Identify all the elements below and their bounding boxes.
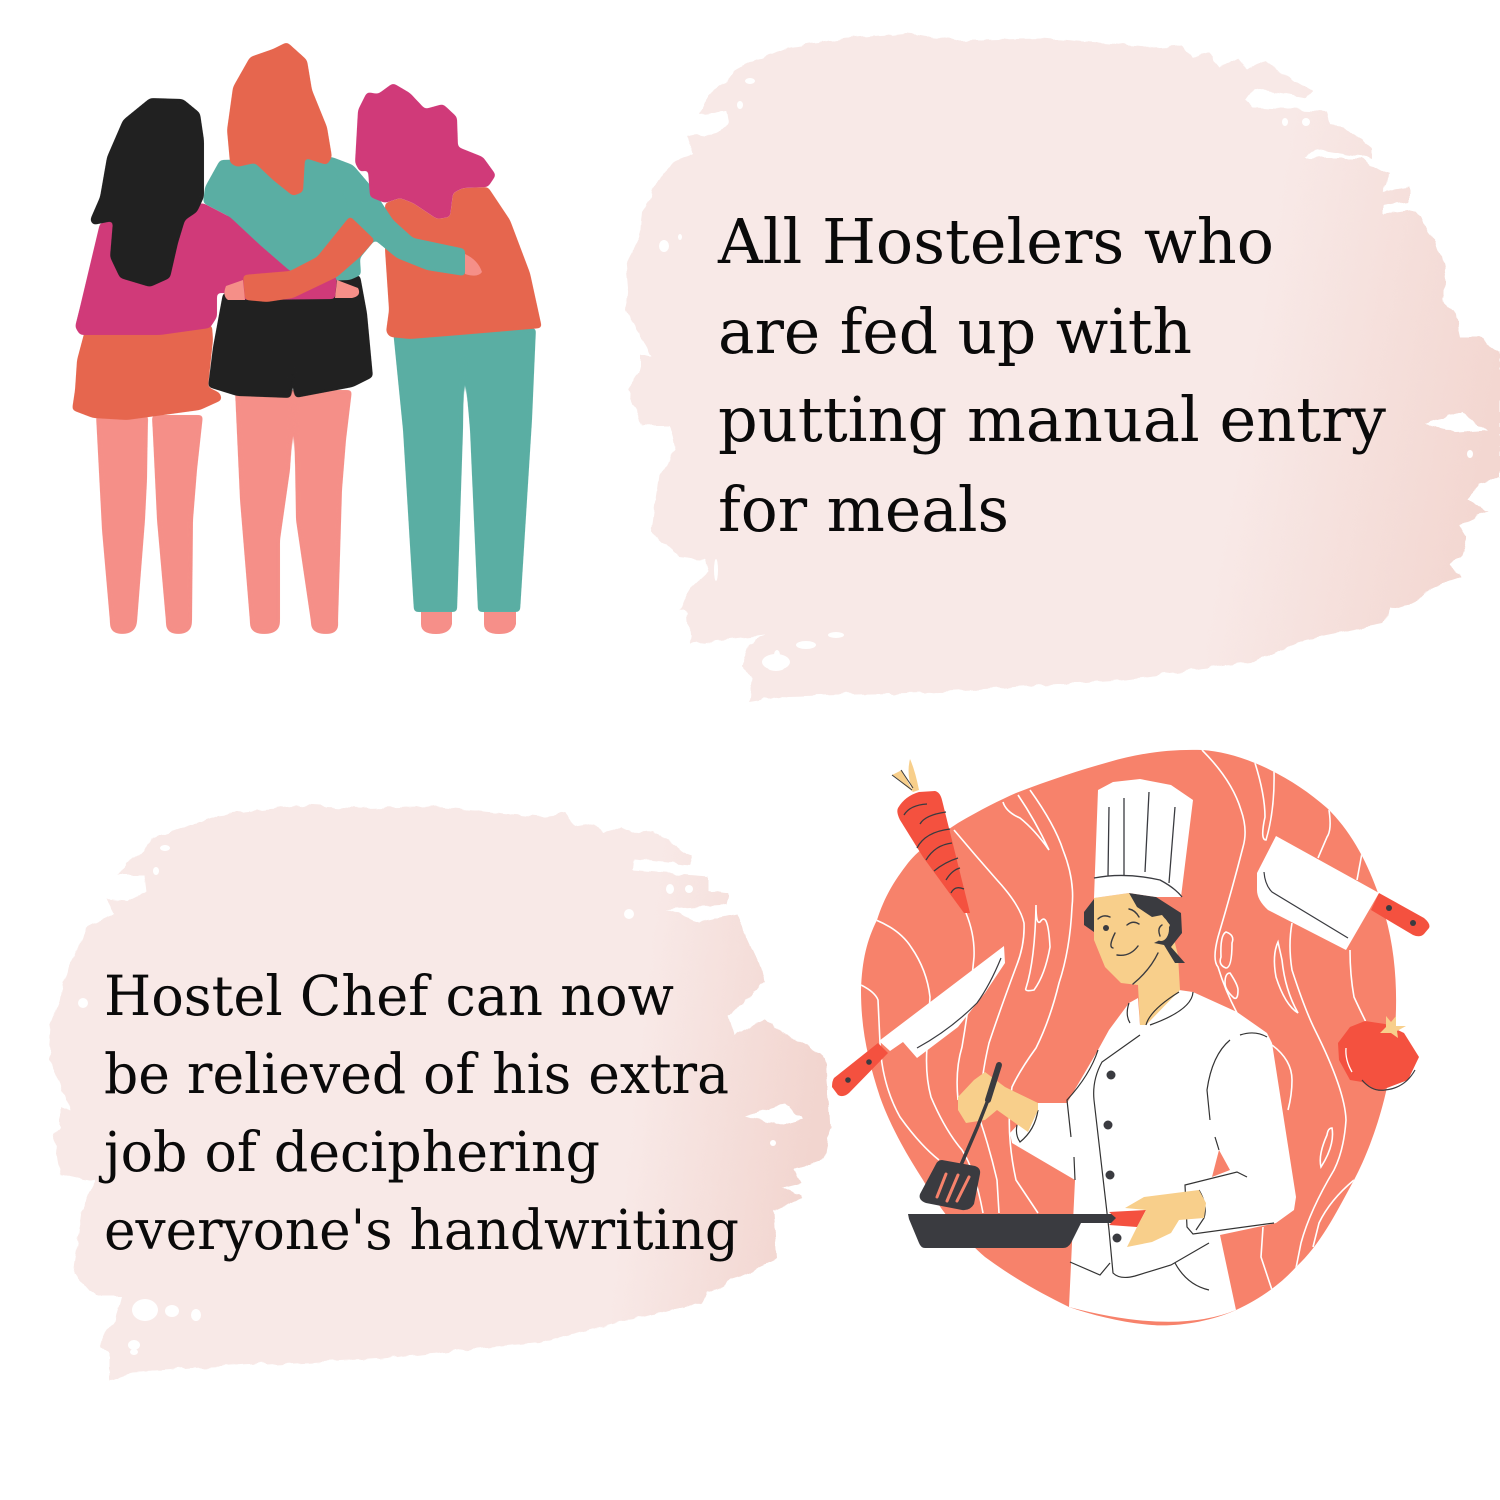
- cleaver: [1257, 836, 1429, 950]
- hat lines: [1094, 792, 1182, 897]
- friend left: black hair: [90, 98, 204, 287]
- friend middle: arm over right: [332, 165, 465, 276]
- text: hostelers: putting manual entry: [718, 383, 1386, 456]
- skin: face and neck: [1094, 893, 1180, 1025]
- text: hostelers: [717, 205, 1386, 546]
- friend right: arm over middle: [243, 216, 375, 302]
- pan: [908, 1214, 1116, 1248]
- text: hostelers: for meals: [718, 473, 1009, 546]
- chef jacket: [1010, 990, 1296, 1322]
- chef hat: [1094, 779, 1193, 898]
- knife: [832, 946, 1005, 1096]
- apple: [1338, 1016, 1419, 1091]
- friend left: legs: [96, 415, 203, 634]
- spatula: [920, 1065, 999, 1210]
- text: chef: be relieved of his extra: [104, 1042, 729, 1106]
- gap between arm and body: [1212, 1150, 1230, 1177]
- friend middle: orange hair: [227, 42, 332, 196]
- jacket details: [1016, 992, 1274, 1290]
- eye: [1103, 925, 1109, 931]
- friend right: top: [385, 187, 542, 339]
- friend right: trousers: [393, 328, 536, 612]
- text: chef: [98, 964, 739, 1262]
- coral blob background: [861, 750, 1396, 1325]
- carrot: [892, 759, 970, 913]
- brush panel: bottom: [48, 805, 830, 1380]
- friend left: top: [75, 203, 337, 335]
- friend middle: top: [203, 157, 465, 285]
- ear: [1153, 917, 1169, 941]
- pan handle: [1109, 1210, 1146, 1227]
- illustration: three friends hugging: [72, 42, 542, 634]
- illustration: chef: [832, 750, 1429, 1325]
- brush gaps: decorative speckles: [78, 78, 1473, 1355]
- hair: [1129, 893, 1185, 963]
- text: hostelers: All Hostelers who: [717, 205, 1274, 278]
- friend right: magenta hair: [355, 83, 496, 219]
- face details: [1098, 909, 1162, 984]
- sideburn: [1084, 899, 1094, 932]
- wood grain lines: [861, 750, 1392, 1290]
- hand: pan: [1125, 1190, 1206, 1247]
- friend middle: shorts: [208, 275, 373, 398]
- friend right: feet: [421, 612, 516, 634]
- brush panel: top: [626, 33, 1500, 702]
- hand: spatula: [958, 1072, 1038, 1132]
- friend left: skirt: [72, 325, 222, 420]
- text: chef: everyone's handwriting: [104, 1198, 739, 1262]
- friend middle: legs: [235, 390, 352, 634]
- text: chef: job of deciphering: [98, 1120, 600, 1184]
- hands: [224, 254, 482, 300]
- text: hostelers: are fed up with: [718, 295, 1192, 368]
- text: chef: Hostel Chef can now: [104, 964, 674, 1028]
- jacket buttons: [1104, 1070, 1122, 1242]
